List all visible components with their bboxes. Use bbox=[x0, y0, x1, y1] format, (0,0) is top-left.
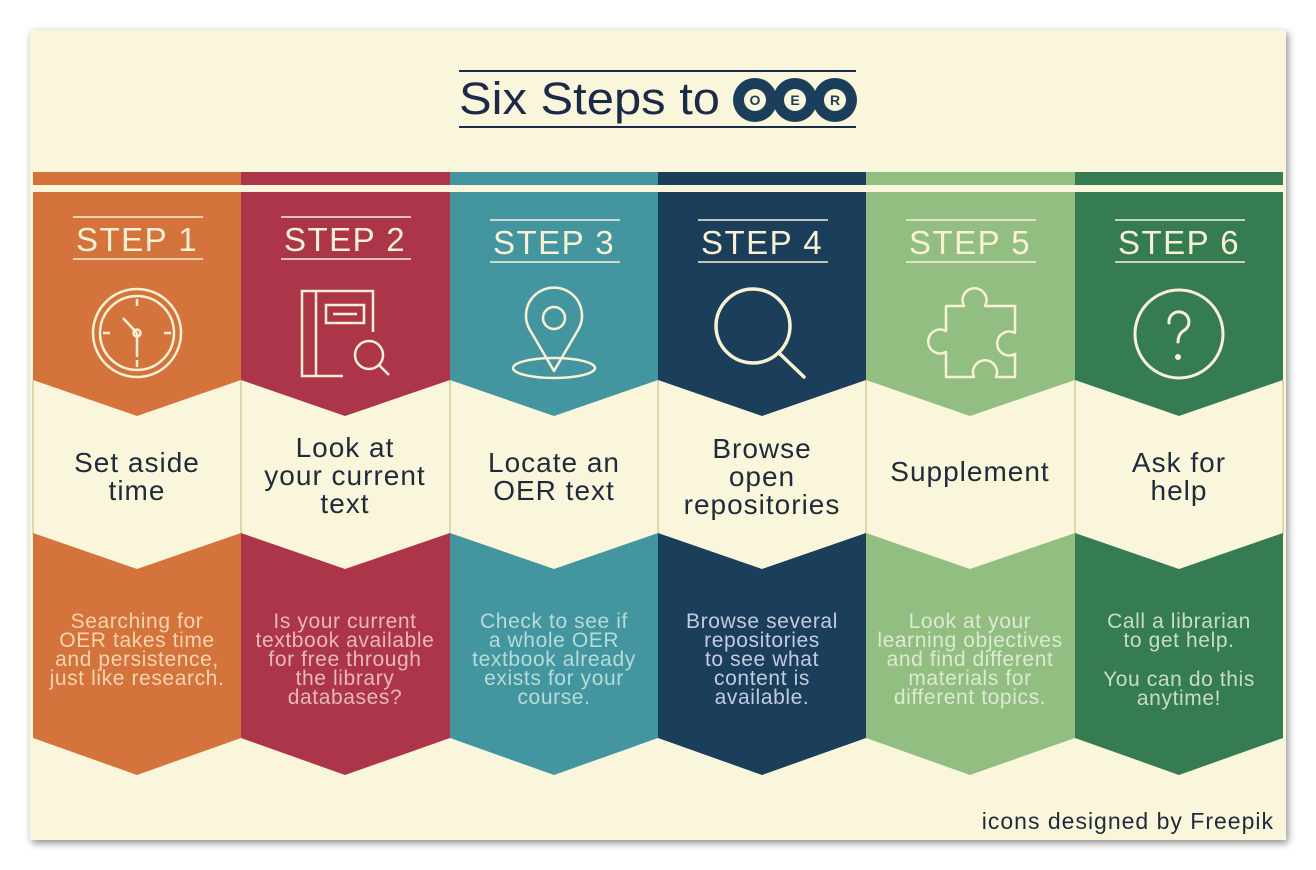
logo: OER: E bbox=[790, 92, 800, 108]
credit: icons designed by Freepik bbox=[982, 808, 1274, 834]
description: and persistence, bbox=[55, 648, 219, 671]
description: materials for bbox=[908, 667, 1032, 690]
description: Look at your bbox=[909, 610, 1031, 633]
text: Ask for help: help bbox=[1151, 475, 1207, 506]
step 1 column bbox=[33, 172, 241, 775]
description: OER takes time bbox=[59, 629, 215, 652]
description: textbook available bbox=[256, 629, 434, 652]
description: available. bbox=[715, 686, 809, 709]
description: repositories bbox=[704, 629, 820, 652]
description: Call a librarian bbox=[1107, 610, 1251, 633]
text: Browse open repositories: open bbox=[729, 461, 795, 492]
icon: location pin bbox=[513, 288, 595, 378]
description: Check to see if bbox=[480, 610, 628, 633]
heading: STEP 6: STEP 6 bbox=[1118, 224, 1240, 261]
description: to get help. bbox=[1123, 629, 1235, 652]
heading: STEP 3: STEP 3 bbox=[493, 224, 615, 261]
icon: puzzle piece bbox=[928, 288, 1015, 377]
description: the library bbox=[296, 667, 394, 690]
step 6 column bbox=[1075, 172, 1283, 775]
icon: magnifier bbox=[716, 289, 804, 377]
logo: OER: O bbox=[750, 92, 761, 108]
text: Look at your current text: Look at bbox=[296, 432, 394, 463]
description: learning objectives bbox=[877, 629, 1063, 652]
description: Browse several bbox=[686, 610, 838, 633]
text: Locate an OER text: Locate an bbox=[488, 447, 620, 478]
description: just like research. bbox=[49, 667, 224, 690]
description: Is your current bbox=[273, 610, 417, 633]
text: Look at your current text: text bbox=[320, 488, 370, 519]
description: databases? bbox=[288, 686, 402, 709]
step 3 column bbox=[450, 172, 658, 775]
icon: book with magnifier bbox=[302, 291, 389, 376]
step 2 column bbox=[241, 172, 450, 775]
title: Six Steps to bbox=[459, 73, 720, 124]
description: anytime! bbox=[1137, 687, 1221, 710]
description: to see what bbox=[705, 648, 819, 671]
text: Browse open repositories: repositories bbox=[684, 489, 840, 520]
logo: OER: R bbox=[830, 92, 840, 108]
step 5 column bbox=[866, 172, 1075, 775]
text: Browse open repositories: Browse bbox=[712, 433, 812, 464]
description: course. bbox=[517, 686, 591, 709]
description: for free through bbox=[268, 648, 422, 671]
text: Set aside time: Set aside bbox=[74, 447, 200, 478]
description: different topics. bbox=[894, 686, 1046, 709]
icon: clock bbox=[93, 289, 181, 377]
description: a whole OER bbox=[489, 629, 619, 652]
text: Locate an OER text: OER text bbox=[493, 475, 615, 506]
icon: question mark circle bbox=[1135, 290, 1223, 378]
description: You can do this bbox=[1103, 668, 1255, 691]
description: Searching for bbox=[71, 610, 203, 633]
step 4 column bbox=[658, 172, 866, 775]
heading: STEP 2: STEP 2 bbox=[284, 221, 406, 258]
logo: OER bbox=[733, 78, 857, 122]
description: textbook already bbox=[472, 648, 636, 671]
text: Set aside time: time bbox=[109, 475, 165, 506]
title bbox=[459, 71, 857, 127]
heading: STEP 1: STEP 1 bbox=[76, 221, 198, 258]
text: Ask for help: Ask for bbox=[1132, 447, 1226, 478]
heading: STEP 4: STEP 4 bbox=[701, 224, 823, 261]
heading: STEP 5: STEP 5 bbox=[909, 224, 1031, 261]
description: and find different bbox=[887, 648, 1053, 671]
description: exists for your bbox=[484, 667, 624, 690]
text: Supplement: Supplement bbox=[890, 456, 1050, 487]
dividers bbox=[33, 380, 1283, 535]
description: content is bbox=[714, 667, 810, 690]
text: Look at your current text: your current bbox=[264, 460, 426, 491]
